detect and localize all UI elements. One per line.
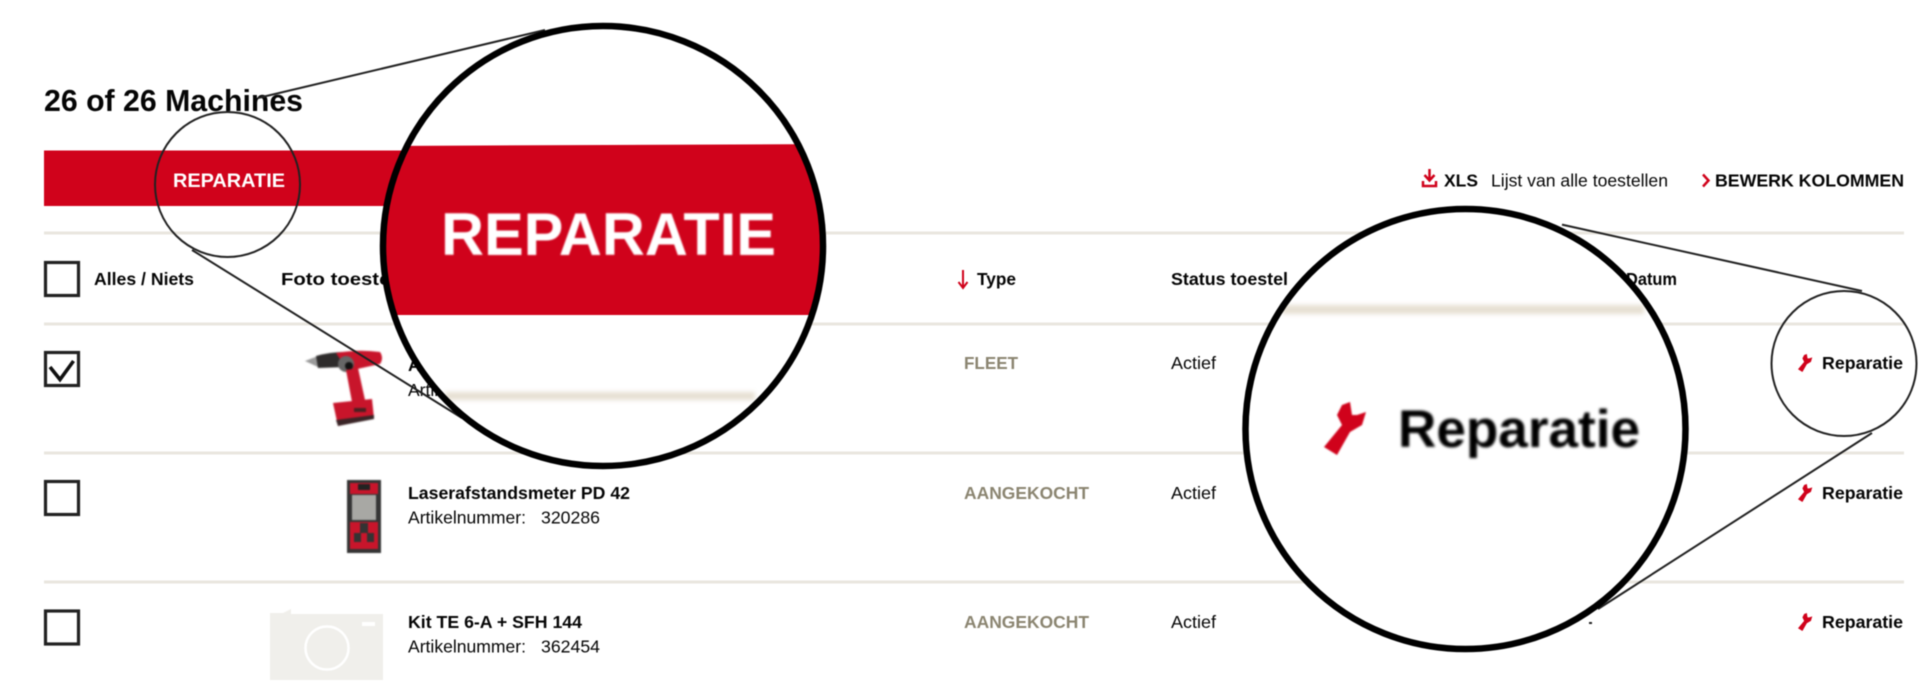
row 2: laser meter: 320286 [541,508,600,528]
small magnifier circle right [1772,291,1916,436]
export xls link [1423,169,1668,190]
row 1: drill [46,351,1216,426]
row 3: kit with placeholder photo: Actief [1171,612,1216,632]
row 2: laser meter: Artikelnummer: [408,508,526,528]
row 3: kit with placeholder photo: AANGEKOCHT [964,612,1089,632]
row 3: kit with placeholder photo: Artikelnummer: [408,636,526,656]
large magnifier left [370,26,840,466]
connector lines right [1562,225,1872,609]
row 2: laser meter [46,480,1903,553]
row 2: laser meter: AANGEKOCHT [964,483,1089,503]
large magnifier right: Reparatie [1398,400,1640,459]
large magnifier left: REPARATIE [441,201,776,268]
table header: Foto toestel [281,269,396,289]
row 2: laser meter: Reparatie [1822,483,1903,503]
table header: Status toestel [1171,269,1288,289]
edit columns link: BEWERK KOLOMMEN [1715,170,1904,190]
row 2: laser meter: Actief [1171,483,1216,503]
connector lines left [192,30,545,418]
table header: Alles / Niets [94,269,194,289]
table header: Datum [1626,269,1677,289]
row 3: kit with placeholder photo [46,609,1903,680]
small magnifier circle left [155,112,300,257]
row 3: kit with placeholder photo: Kit TE 6-A + SFH 144 [408,612,582,632]
export xls link: Lijst van alle toestellen [1491,170,1668,190]
row dividers [44,232,1904,584]
table header [46,262,1677,296]
large magnifier right [1246,209,1686,649]
row 1 repair action: Reparatie [1822,353,1903,373]
row 1: drill: A [408,355,421,375]
row 2: laser meter: Laserafstandsmeter PD 42 [408,483,630,503]
table header: Type [977,269,1016,289]
title: 26 of 26 Machines [44,84,303,118]
row 1: drill: FLEET [964,353,1018,373]
row 3: kit with placeholder photo: Reparatie [1822,612,1903,632]
row 1: drill: Actief [1171,353,1216,373]
row 3: kit with placeholder photo: 362454 [541,636,600,656]
red action bar [44,150,444,206]
export xls link: XLS [1444,170,1478,190]
row 1: drill: Artikelnummer: [408,380,526,400]
red action bar: REPARATIE [173,170,285,192]
